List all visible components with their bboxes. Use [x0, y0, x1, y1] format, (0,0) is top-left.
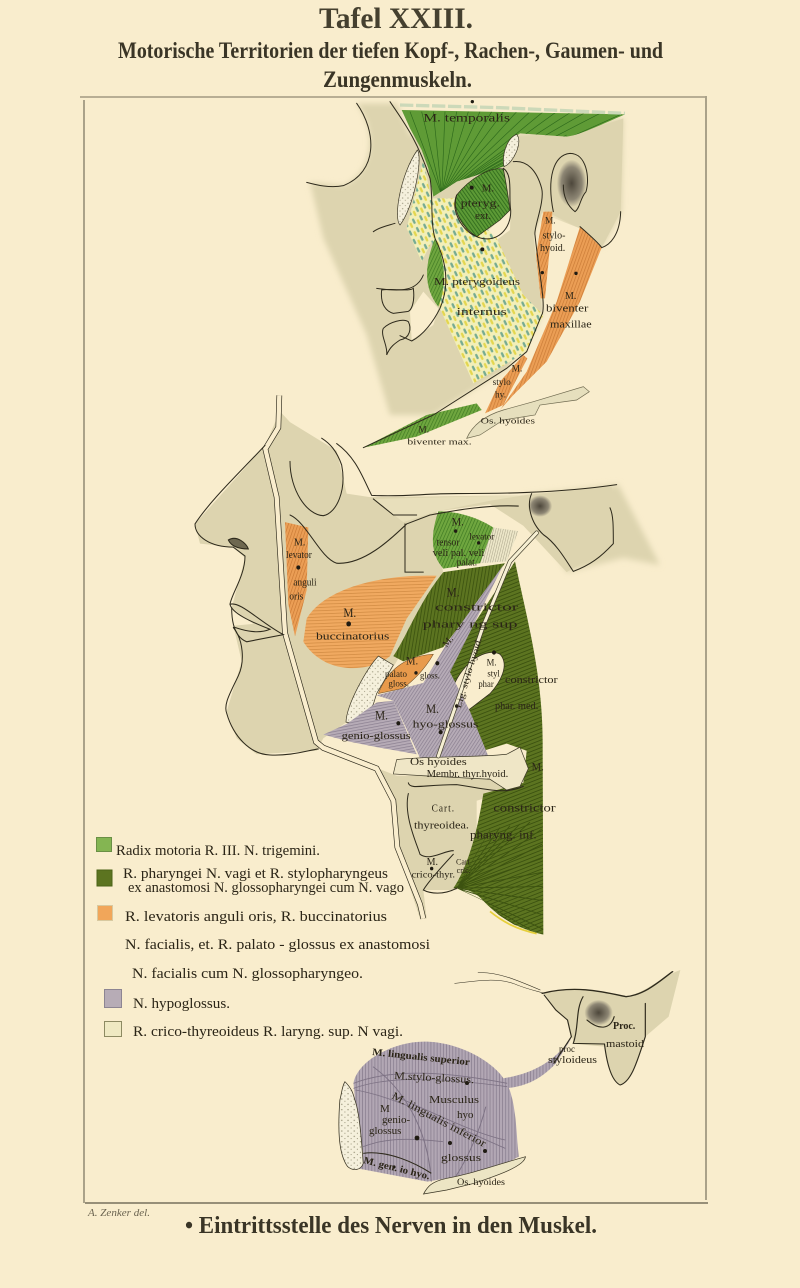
muscle: stylohyoid	[485, 212, 552, 413]
labels: middle figure: M.	[532, 761, 544, 774]
caption: nerve entry point: • Eintrittsstelle des Nerven in den Muskel.	[185, 1213, 597, 1239]
skull bone shading	[310, 103, 623, 415]
muscle: tongue body	[353, 1042, 519, 1182]
labels: middle figure: constrictor	[493, 802, 556, 815]
skull tail soft shading	[523, 485, 660, 572]
labels: tongue figure: glossus	[369, 1125, 401, 1137]
tongue fibre bands	[353, 1067, 507, 1182]
muscle: pterygoideus internus	[407, 160, 543, 383]
pale oval opening	[452, 652, 504, 711]
ligament: stylohyoid strip	[438, 533, 537, 756]
labels: tongue figure: hyo	[457, 1109, 474, 1121]
hyoid bone	[424, 1157, 525, 1194]
labels: upper figure: M.	[418, 425, 429, 435]
muscle: stylo-glossus strap	[503, 1038, 571, 1088]
nerve entry dots	[470, 100, 578, 275]
muscle: palato-glossus	[378, 654, 433, 694]
labels: upper figure: pteryg.	[461, 198, 500, 210]
labels: tongue figure: Musculus	[429, 1094, 479, 1106]
plate frame	[80, 96, 708, 1203]
labels: tongue figure: Proc.	[613, 1021, 636, 1032]
face and skull bone	[195, 411, 613, 754]
legend text: crico-thyreoideus: R. crico-thyreoideus R. laryng. sup. N vagi.	[133, 1024, 403, 1040]
legend swatch: orange	[98, 906, 112, 920]
legend text: pharyngei	[123, 866, 404, 896]
outlines	[455, 972, 673, 1085]
muscle: genio-glossus	[323, 701, 417, 754]
labels: tongue figure: styloideus	[548, 1055, 597, 1066]
labels: middle figure: phar. med.	[495, 701, 538, 712]
labels: upper figure: ext.	[475, 210, 491, 222]
legend text: radix motoria: Radix motoria R. III. N. trigemini.	[116, 843, 320, 859]
labels: middle figure: genio-glossus	[342, 731, 411, 742]
legend swatch: lilac	[104, 990, 122, 1008]
tendon tissue	[480, 527, 518, 563]
labels: upper figure: Os. hyoides	[481, 415, 536, 425]
labels: middle figure: hyo-glossus	[413, 719, 478, 731]
labels: middle figure: phary ng sup	[423, 619, 518, 631]
pale gaps	[410, 210, 580, 340]
muscle: constrictor superior	[393, 563, 505, 661]
labels: tongue figure: M. gen. io hyo.	[362, 1155, 431, 1182]
figure: tongue muscles, lower	[339, 970, 680, 1194]
labels: middle figure: Lig. stylo-hyoid.	[453, 636, 484, 709]
legend swatch: dark green	[97, 870, 112, 886]
muscle: pharyngeal fan fibres	[457, 822, 543, 929]
labels: middle figure: M.	[441, 634, 456, 650]
labels: tongue figure: M.stylo-glossus.	[394, 1070, 475, 1086]
labels: upper figure: internus	[457, 306, 507, 318]
ear opening	[557, 160, 586, 207]
muscle: temporalis	[400, 105, 625, 197]
labels: middle figure: anguli	[293, 577, 317, 588]
labels: upper figure: M.	[545, 216, 556, 226]
subtitle: Zungenmuskeln.	[323, 67, 472, 92]
labels: middle figure: thyreoidea.	[414, 820, 469, 832]
labels: tongue figure: glossus	[441, 1152, 481, 1164]
labels: middle figure: M.	[406, 655, 418, 667]
mandible spongy bone	[339, 1082, 363, 1170]
labels: upper figure: hy.	[495, 391, 506, 401]
hyoid bone	[467, 387, 589, 438]
labels: middle figure: Membr. thyr.hyoid.	[427, 769, 508, 780]
labels: upper figure: biventer	[546, 304, 589, 315]
mandible spongy bone	[346, 656, 393, 722]
labels: middle figure: gloss.	[388, 679, 409, 690]
mandible spongy bone	[397, 134, 519, 225]
labels: middle figure: constrictor	[505, 675, 558, 686]
labels: middle figure: Cart.	[432, 803, 455, 815]
outlines	[307, 102, 621, 448]
labels: middle figure: M.	[452, 516, 464, 529]
labels: tongue figure	[362, 1021, 644, 1187]
nerve strip along the section line	[265, 395, 423, 919]
labels: middle figure: levator	[469, 532, 495, 542]
muscle: tensor veli palatini	[433, 511, 493, 569]
muscle: buccinatorius	[303, 576, 437, 668]
legend text: pharyngei: R. pharyngei N. vagi et R. stylopharyngeus	[123, 866, 388, 882]
labels: upper figure: M.	[565, 291, 576, 302]
labels: middle figure: phar	[478, 679, 494, 689]
legend text: facialis cum: N. facialis cum N. glossopharyngeo.	[132, 966, 363, 982]
labels: tongue figure: M	[380, 1103, 390, 1115]
figure: head and pharynx muscles, middle	[195, 395, 660, 935]
labels: middle figure: crico-thyr.	[412, 870, 455, 881]
labels: upper figure: M. pterygoideus	[434, 276, 520, 288]
outlines	[195, 438, 617, 893]
labels: middle figure: M.	[343, 607, 356, 620]
skull bone	[544, 970, 680, 1085]
labels: middle figure: M.	[294, 537, 305, 548]
labels: tongue figure: proc	[559, 1044, 575, 1054]
labels: middle figure: tensor	[437, 537, 460, 548]
subtitle: Motorische Territorien der tiefen Kopf-, Rachen-, Gaumen- und	[118, 38, 663, 63]
labels: tongue figure: M. lingualis inferior	[390, 1090, 488, 1150]
labels: middle figure: M.	[447, 586, 460, 600]
artist credit: A. Zenker del.	[87, 1208, 150, 1219]
labels: middle figure: M.	[375, 709, 388, 722]
muscle: constrictor pharyngis, large	[447, 561, 543, 935]
title: Tafel XXIII.	[319, 2, 473, 35]
labels: upper figure: M.	[482, 183, 494, 195]
labels: middle figure: gloss.	[420, 670, 440, 681]
muscle: biventer lower	[363, 403, 482, 448]
labels: upper figure	[407, 113, 592, 446]
legend swatch: pale	[104, 1022, 122, 1036]
legend text: levatoris: R. levatoris anguli oris, R. buccinatorius	[125, 909, 387, 925]
labels: upper figure: stylo-	[543, 230, 565, 241]
legend swatch: light green	[96, 838, 112, 852]
subtitle	[118, 38, 663, 92]
labels: tongue figure: mastoid	[606, 1039, 644, 1050]
labels: tongue figure: Os. hyoides	[457, 1177, 506, 1187]
labels: middle figure: veli pal. veli	[433, 548, 485, 559]
muscle: levator anguli oris	[285, 522, 308, 636]
labels: upper figure: M.	[512, 365, 522, 375]
figure: head muscles, upper	[307, 100, 625, 448]
skull bone right side	[440, 118, 623, 383]
lighter bone under the arch	[373, 495, 523, 522]
labels: middle figure: palat.	[457, 557, 477, 569]
labels: upper figure: biventer max.	[407, 436, 472, 446]
labels: middle figure: M.	[427, 857, 438, 868]
legend text: facialis: N. facialis, et. R. palato - glossus ex anastomosi	[125, 937, 430, 953]
labels: upper figure: maxillae	[550, 320, 592, 331]
muscle: pterygoideus externus	[455, 169, 510, 237]
labels: middle figure: pharyng. inf.	[470, 829, 537, 842]
labels: middle figure: M.	[487, 657, 497, 668]
labels: middle figure: palato	[385, 670, 407, 680]
labels: tongue figure: genio-	[382, 1114, 410, 1126]
labels: middle figure: Cart	[456, 857, 470, 866]
legend text: pharyngei: ex anastomosi N. glossopharyngei cum N. vago	[128, 880, 404, 896]
muscle: biventer maxillae	[500, 227, 602, 410]
labels: upper figure: M. temporalis	[423, 113, 510, 125]
muscle: yellow tip of fan	[490, 911, 537, 934]
legend	[96, 838, 430, 1040]
ear opening	[585, 1000, 613, 1025]
labels: middle figure: styl	[487, 668, 500, 678]
labels: middle figure: cric.	[457, 866, 471, 875]
legend text: hypoglossus: N. hypoglossus.	[133, 996, 230, 1012]
hyoid and thyrohyoid membrane	[393, 747, 528, 790]
labels: upper figure: hyoid.	[540, 243, 565, 254]
labels: middle figure: levator	[286, 550, 313, 561]
muscle: hyo-glossus	[377, 565, 503, 758]
labels: middle figure: constrictor	[435, 602, 519, 613]
neck and thyroid bone	[323, 747, 523, 919]
nerve entry dots	[296, 529, 496, 870]
labels: middle figure	[286, 516, 558, 881]
labels: middle figure: Os hyoides	[410, 757, 467, 768]
labels: upper figure: stylo	[493, 378, 511, 388]
ear opening	[528, 495, 552, 517]
labels: middle figure: buccinatorius	[316, 631, 389, 642]
labels: middle figure: oris	[289, 591, 304, 603]
muscle: small pterygoid slip	[427, 238, 444, 307]
labels: middle figure: M.	[426, 703, 439, 716]
labels: tongue figure: M. lingualis superior	[372, 1047, 471, 1068]
nerve entry dots	[392, 1081, 487, 1169]
